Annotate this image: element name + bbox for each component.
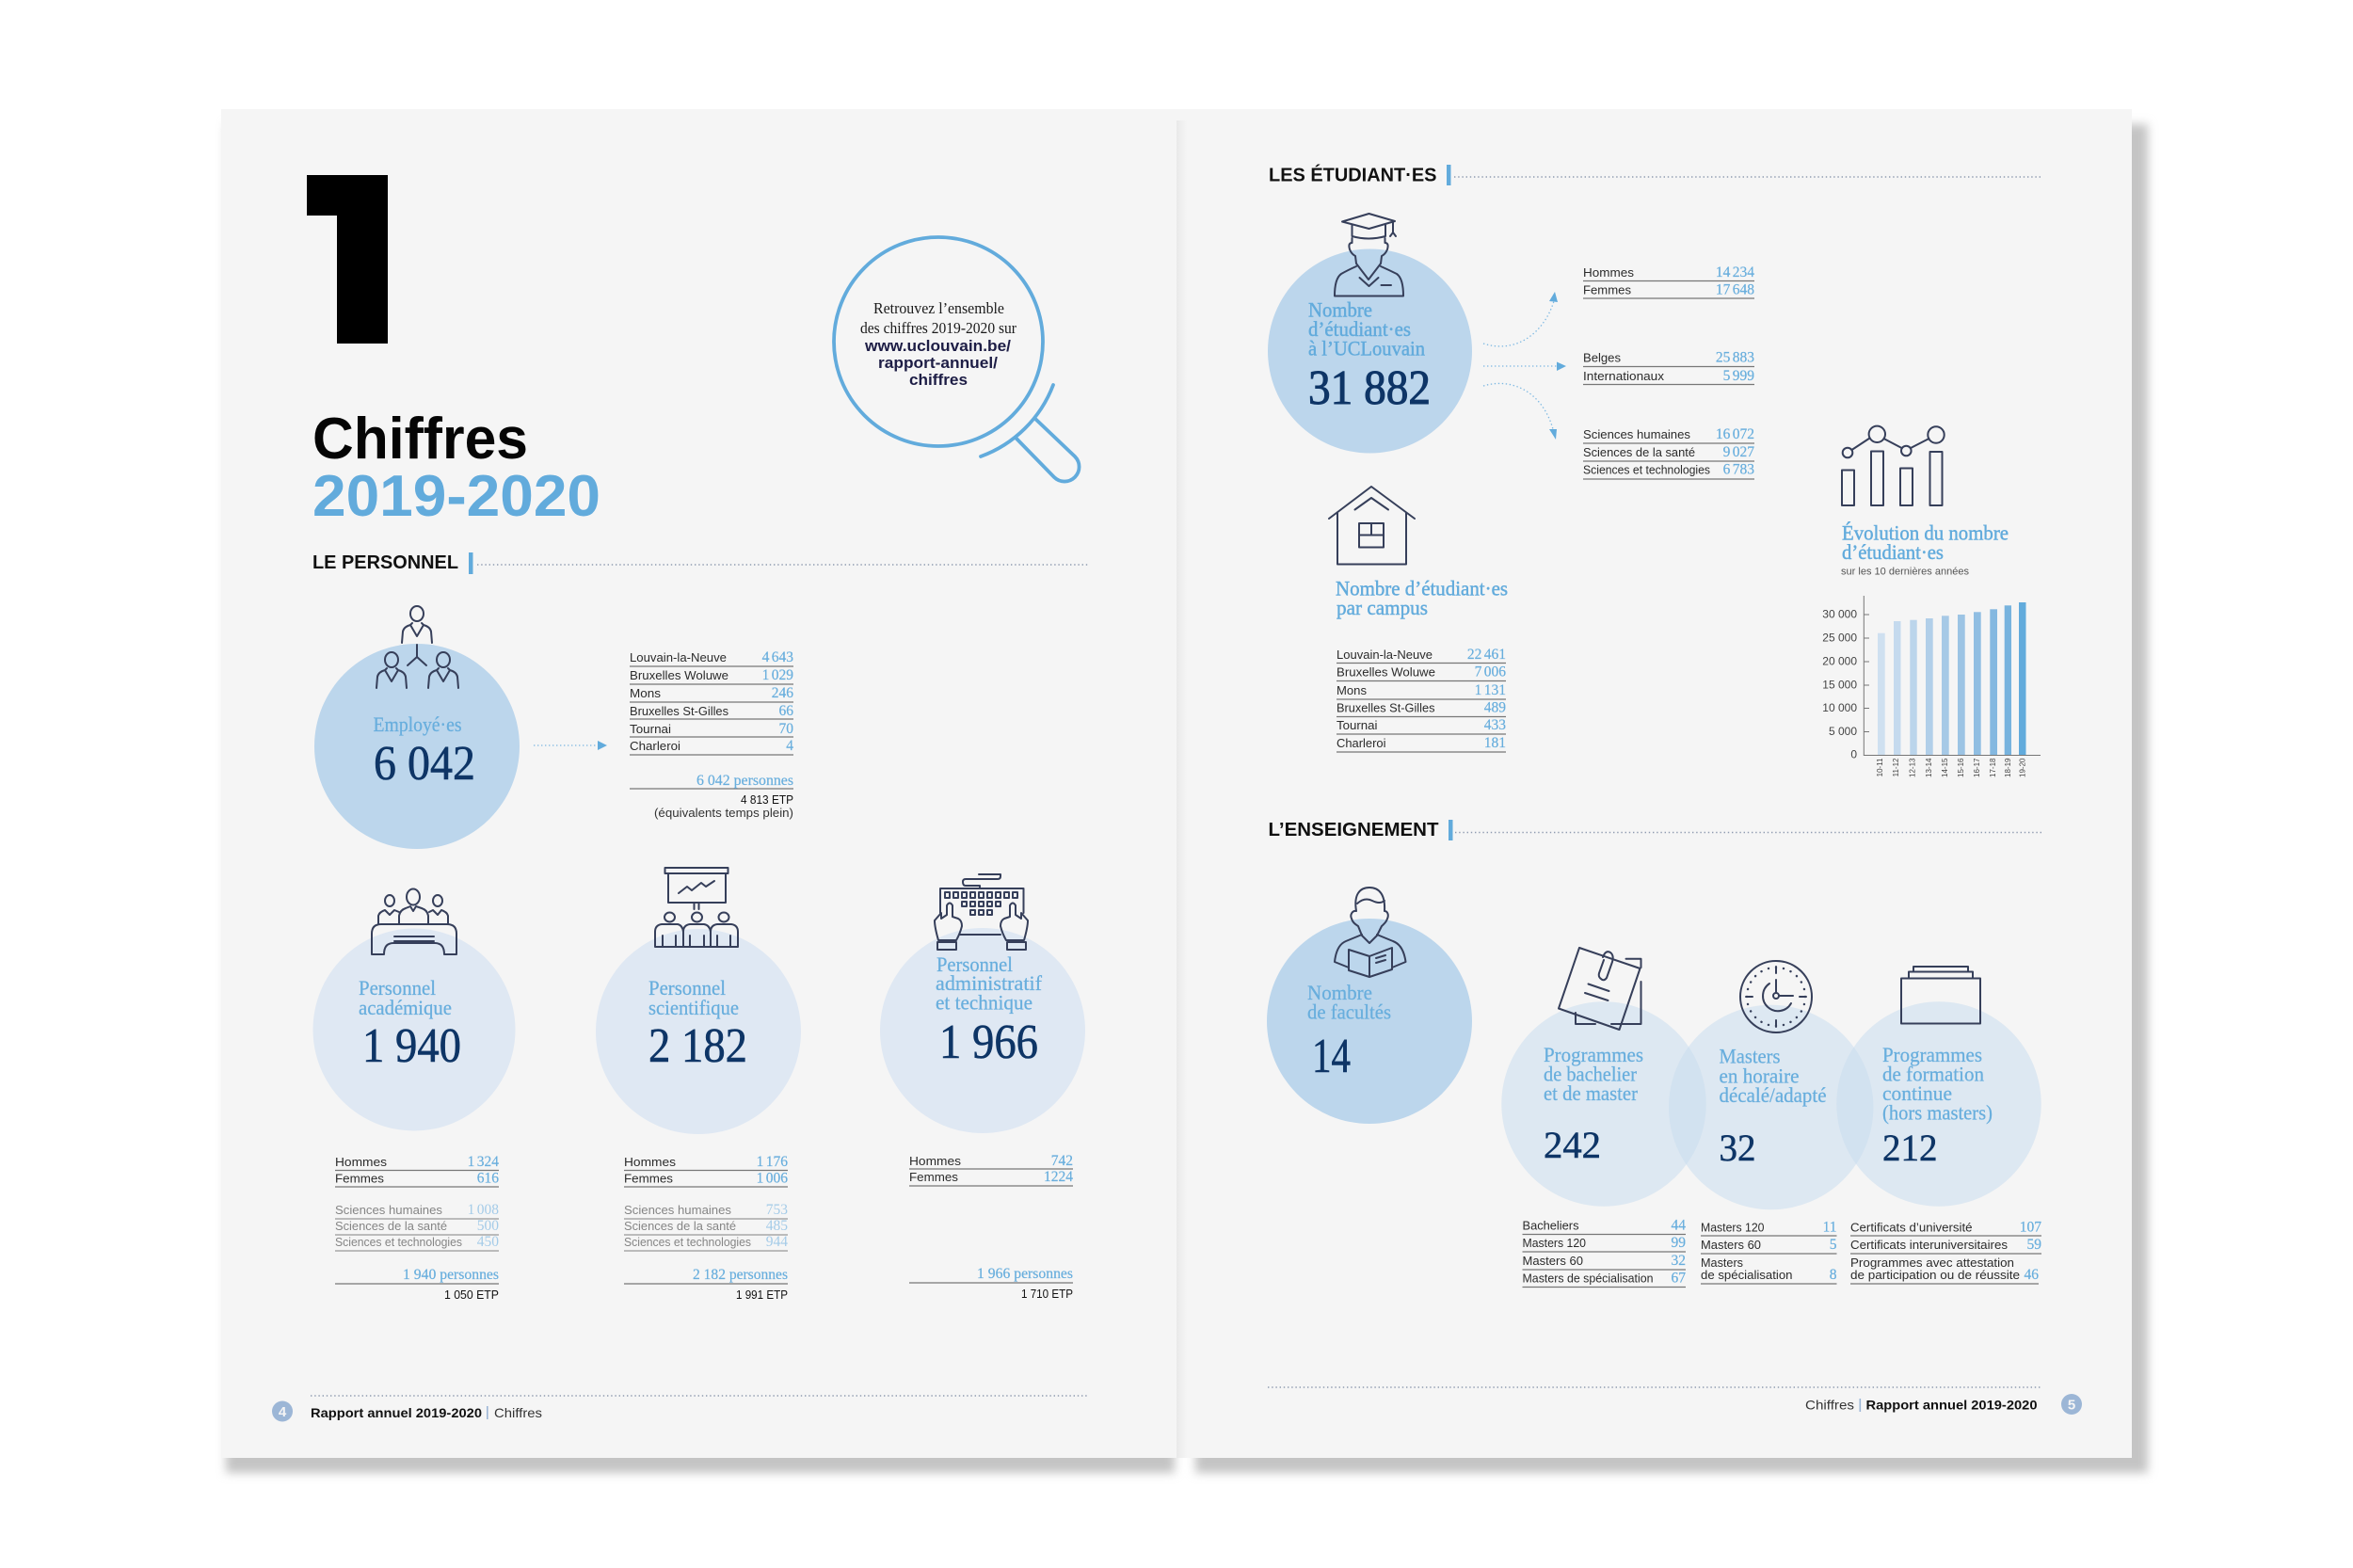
panel: personnel académique: Personnel (359, 976, 436, 1000)
panel: programmes de formation continue (1836, 1001, 2041, 1207)
table: personnel administratif et technique: 1224 (1044, 1169, 1073, 1185)
table: personnel scientifique: 2 182 personnes (693, 1267, 788, 1283)
table: employés par campus: 6 042 personnes (696, 773, 793, 789)
table: nationalité: 5 999 (1723, 368, 1754, 384)
bar chart: évolution du nombre d'étudiant·es: 20 000 (1822, 655, 1857, 668)
footer: left page: Chiffres (494, 1405, 542, 1420)
table: personnel académique: 1 008 (468, 1202, 499, 1218)
table: personnel administratif et technique: 1 710 ETP (1021, 1287, 1073, 1301)
table: programmes: 32 (1672, 1253, 1686, 1269)
heading: étudiant·es par campus: par campus (1337, 596, 1428, 619)
heading: évolution: Évolution du nombre (1842, 521, 2009, 544)
table: étudiant·es par campus: 22 461 (1467, 647, 1506, 663)
table: employés par campus: 246 (772, 685, 793, 701)
table: étudiant·es par campus: Mons (1337, 683, 1367, 697)
panel: nombre d'étudiant·es: 31 882 (1308, 361, 1431, 415)
heading: évolution: sur les 10 dernières années (1841, 567, 1969, 578)
table: personnel académique: Sciences de la santé (335, 1219, 447, 1233)
page backgrounds (221, 109, 2132, 1458)
table: personnel académique: Sciences et technologies (335, 1235, 462, 1249)
callout: magnifier (834, 237, 1080, 482)
table: étudiant·es par campus: Tournai (1337, 718, 1378, 732)
table: étudiant·es par campus: Bruxelles Woluwe (1337, 664, 1435, 680)
table: personnel scientifique: 485 (766, 1218, 788, 1234)
panel: employés: Employé·es (373, 712, 461, 736)
table: nationalité: Internationaux (1583, 369, 1665, 383)
bar chart: évolution du nombre d'étudiant·es: 14-15 (1941, 758, 1949, 777)
heading: l'enseignement (1269, 820, 2041, 840)
icon: clipped documents (1559, 948, 1641, 1030)
heading: évolution (1841, 521, 2009, 578)
table: employés par campus: 4 813 ETP (741, 792, 793, 807)
panel: nombre d'étudiant·es: d’étudiant·es (1308, 317, 1411, 341)
table: employés par campus: Louvain-la-Neuve (630, 650, 727, 664)
panel: employés: 6 042 (374, 737, 475, 791)
table: employés par campus: 4 643 (762, 649, 793, 665)
panel: masters en horaire décalé (1669, 1005, 1873, 1209)
table: hommes femmes: 14 234 (1716, 264, 1754, 280)
table: employés par campus: 4 (786, 738, 793, 754)
table: formation continue: de participation ou de réussite (1850, 1268, 2020, 1282)
table: hommes femmes (1583, 264, 1754, 298)
bar chart: évolution du nombre d'étudiant·es: 15-16 (1957, 758, 1965, 777)
table: personnel académique: 1 050 ETP (444, 1288, 499, 1302)
table: personnel académique: 450 (477, 1234, 499, 1250)
callout: magnifier: www.uclouvain.be/ (864, 337, 1011, 355)
chapter number 1 (307, 175, 388, 344)
table: étudiant·es par campus: 7 006 (1475, 664, 1506, 680)
table: personnel scientifique: 1 006 (757, 1171, 788, 1186)
table: masters horaire décalé: Masters (1701, 1256, 1743, 1270)
panel: programmes de formation continue: (hors masters) (1882, 1101, 1993, 1124)
panel: personnel administratif et technique: 1 966 (939, 1016, 1038, 1069)
table: formation continue: 107 (2020, 1220, 2041, 1235)
title: Chiffres (312, 407, 528, 472)
icon: employee hierarchy (376, 606, 458, 688)
table: personnel administratif et technique: Femmes (909, 1170, 959, 1184)
footer: left page (272, 1396, 1087, 1421)
bar chart: évolution du nombre d'étudiant·es: 18-19 (2004, 758, 2012, 777)
bar chart: évolution du nombre d'étudiant·es: 19-20 (2018, 758, 2027, 777)
arrows: student breakdowns (1483, 292, 1566, 440)
heading: étudiant·es par campus: Nombre d’étudiant·es (1336, 576, 1508, 600)
bar chart: évolution du nombre d'étudiant·es: 5 000 (1829, 725, 1857, 738)
table: personnel scientifique: Hommes (624, 1155, 677, 1169)
icon: graduate (1335, 214, 1403, 296)
table: personnel scientifique (624, 1154, 788, 1302)
table: secteurs (1583, 426, 1754, 479)
table: hommes femmes: Femmes (1583, 282, 1632, 297)
callout: magnifier: des chiffres 2019-2020 sur (860, 319, 1016, 337)
icon: presentation board and audience (655, 868, 738, 947)
table: étudiant·es par campus: 433 (1484, 717, 1506, 733)
table: programmes: 99 (1672, 1235, 1686, 1251)
panel: programmes de formation continue: de formation (1882, 1062, 1984, 1086)
callout: magnifier: chiffres (909, 371, 968, 389)
table: programmes: Masters de spécialisation (1523, 1271, 1653, 1286)
table: programmes: Bacheliers (1523, 1218, 1579, 1233)
table: personnel administratif et technique: 1 966 personnes (977, 1266, 1073, 1282)
panel: nombre de facultés: 14 (1312, 1030, 1351, 1083)
panel: personnel scientifique (596, 929, 801, 1134)
table: étudiant·es par campus: Louvain-la-Neuve (1337, 648, 1433, 662)
heading: les étudiant·es: LES ÉTUDIANT·ES (1269, 164, 1436, 186)
table: formation continue (1850, 1220, 2041, 1284)
heading: les étudiant·es (1269, 164, 2042, 186)
icon: house (1329, 487, 1415, 565)
panel: programmes de formation continue: continue (1882, 1081, 1952, 1105)
icon: person reading a book (1335, 888, 1406, 977)
table: nationalité: Belges (1583, 350, 1622, 365)
table: personnel scientifique: Sciences humaines (624, 1203, 731, 1217)
footer: right page: 5 (2068, 1397, 2075, 1414)
footer: right page: Chiffres (1805, 1397, 1854, 1412)
icon: lectern with three people (372, 888, 456, 954)
bar chart: évolution du nombre d'étudiant·es: 13-14 (1925, 758, 1933, 777)
table: personnel scientifique: Sciences et technologies (624, 1235, 751, 1249)
table: personnel académique: 1 324 (468, 1154, 499, 1170)
table: employés par campus: (équivalents temps plein) (654, 806, 793, 820)
panel: nombre d'étudiant·es: à l’UCLouvain (1308, 337, 1425, 360)
table: secteurs: 9 027 (1723, 444, 1754, 460)
icon: clock (1740, 961, 1812, 1032)
panel: employés (314, 644, 520, 849)
table: personnel administratif et technique: Hommes (909, 1154, 962, 1168)
arrow: employés to table (534, 741, 607, 750)
table: personnel académique: Femmes (335, 1171, 385, 1186)
panel: programmes de bachelier et de master: et de master (1544, 1081, 1639, 1105)
panel: personnel scientifique: scientifique (648, 996, 739, 1019)
bar chart: évolution du nombre d'étudiant·es: 16-17 (1973, 758, 1981, 777)
table: masters horaire décalé: 11 (1823, 1220, 1837, 1235)
table: personnel scientifique: Femmes (624, 1171, 674, 1186)
icon: stacked folders (1901, 967, 1980, 1024)
panel: personnel académique: académique (359, 996, 452, 1019)
table: masters horaire décalé: Masters 60 (1701, 1238, 1761, 1252)
table: programmes: 67 (1672, 1271, 1686, 1286)
title (312, 407, 600, 529)
table: personnel académique: 1 940 personnes (403, 1267, 499, 1283)
table: hommes femmes: 17 648 (1716, 282, 1754, 297)
table: employés par campus: Bruxelles Woluwe (630, 668, 728, 682)
table: nationalité (1583, 350, 1754, 384)
table: étudiant·es par campus (1337, 647, 1506, 752)
bar chart: évolution du nombre d'étudiant·es: 15 000 (1822, 678, 1857, 691)
panel: personnel administratif et technique: administratif (936, 971, 1043, 995)
table: programmes (1523, 1218, 1686, 1288)
bar chart: évolution du nombre d'étudiant·es: 0 (1850, 747, 1857, 760)
panel: programmes de bachelier et de master: 242 (1544, 1124, 1601, 1166)
panel: personnel académique: 1 940 (362, 1019, 461, 1073)
table: formation continue: Certificats d’université (1850, 1220, 1973, 1235)
bar chart: évolution du nombre d'étudiant·es (1822, 596, 2041, 777)
panel: masters en horaire décalé: en horaire (1719, 1064, 1800, 1088)
callout: magnifier: rapport-annuel/ (878, 354, 998, 372)
table: secteurs: Sciences et technologies (1583, 463, 1710, 476)
bar chart: évolution du nombre d'étudiant·es: 11-12 (1892, 758, 1900, 776)
table: personnel scientifique: Sciences de la santé (624, 1219, 736, 1233)
table: étudiant·es par campus: Charleroi (1337, 736, 1386, 750)
panel: programmes de formation continue: Programmes (1882, 1043, 1982, 1066)
table: nationalité: 25 883 (1716, 350, 1754, 365)
panel: personnel scientifique: Personnel (648, 976, 726, 1000)
table: étudiant·es par campus: 489 (1484, 700, 1506, 715)
panel: personnel administratif et technique: Personnel (936, 952, 1013, 976)
heading: le personnel (312, 552, 1088, 574)
table: formation continue: Certificats interuniversitaires (1850, 1238, 2009, 1252)
heading: étudiant·es par campus (1336, 576, 1508, 619)
bar chart: évolution du nombre d'étudiant·es: 10 000 (1822, 701, 1857, 714)
panel: programmes de bachelier et de master: Programmes (1544, 1043, 1643, 1066)
bar chart: évolution du nombre d'étudiant·es: 17-18 (1989, 758, 1997, 777)
heading: le personnel: LE PERSONNEL (312, 552, 458, 573)
table: masters horaire décalé: 5 (1830, 1237, 1837, 1253)
table: personnel scientifique: 1 991 ETP (736, 1288, 788, 1302)
table: secteurs: 6 783 (1723, 461, 1754, 478)
table: secteurs: 16 072 (1716, 426, 1754, 442)
panel: nombre de facultés (1267, 919, 1472, 1124)
table: employés par campus: Bruxelles St-Gilles (630, 704, 728, 718)
table: programmes: 44 (1672, 1218, 1686, 1233)
panel: personnel académique (312, 928, 516, 1131)
table: personnel scientifique: 944 (766, 1234, 788, 1250)
table: personnel académique: Sciences humaines (335, 1203, 442, 1217)
table: étudiant·es par campus: 1 131 (1475, 682, 1506, 698)
table: employés par campus: 70 (779, 721, 793, 737)
title: 2019-2020 (312, 464, 600, 529)
footer: right page (1268, 1387, 2082, 1415)
table: personnel académique: 500 (477, 1218, 499, 1234)
bar chart: évolution du nombre d'étudiant·es: 25 000 (1822, 631, 1857, 644)
table: employés par campus: Mons (630, 686, 662, 700)
table: masters horaire décalé: 8 (1830, 1267, 1837, 1283)
table: employés par campus (630, 649, 793, 820)
bar chart: évolution du nombre d'étudiant·es: 12-13 (1909, 758, 1916, 777)
table: étudiant·es par campus: Bruxelles St-Gilles (1337, 700, 1435, 715)
table: employés par campus: Charleroi (630, 739, 680, 753)
icon: hands on keyboard (935, 874, 1028, 950)
table: personnel académique: Hommes (335, 1155, 388, 1169)
table: masters horaire décalé: de spécialisation (1701, 1268, 1792, 1282)
table: secteurs: Sciences de la santé (1583, 445, 1695, 459)
table: personnel administratif et technique (909, 1153, 1073, 1301)
panel: masters en horaire décalé: 32 (1719, 1127, 1756, 1169)
table: masters horaire décalé: Masters 120 (1701, 1220, 1764, 1235)
panel: nombre de facultés: Nombre (1307, 981, 1372, 1004)
table: formation continue: 59 (2027, 1237, 2041, 1253)
table: programmes: Masters 60 (1523, 1254, 1583, 1268)
table: personnel scientifique: 1 176 (757, 1154, 788, 1170)
spread shadows (226, 124, 2148, 1473)
panel: programmes de bachelier et de master (1501, 1001, 1706, 1207)
panel: nombre d'étudiant·es (1268, 248, 1472, 454)
table: personnel scientifique: 753 (766, 1202, 788, 1218)
heading: évolution: d’étudiant·es (1842, 540, 1944, 564)
table: étudiant·es par campus: 181 (1484, 735, 1506, 751)
heading: l'enseignement: L’ENSEIGNEMENT (1269, 820, 1438, 840)
panel: personnel administratif et technique (880, 928, 1085, 1133)
table: employés par campus: 1 029 (762, 667, 793, 683)
panel: personnel administratif et technique: et technique (936, 990, 1032, 1015)
footer: right page: Rapport annuel 2019-2020 (1865, 1397, 2038, 1412)
icon: bars and line chart (1842, 426, 1945, 505)
callout: magnifier: Retrouvez l’ensemble (873, 299, 1004, 317)
table: employés par campus: Tournai (630, 722, 671, 736)
bar chart: évolution du nombre d'étudiant·es: 30 000 (1822, 608, 1857, 621)
table: hommes femmes: Hommes (1583, 265, 1635, 280)
table: personnel académique: 616 (477, 1171, 499, 1186)
panel: programmes de formation continue: 212 (1882, 1127, 1937, 1169)
panel: personnel scientifique: 2 182 (648, 1019, 747, 1073)
panel: programmes de bachelier et de master: de bachelier (1544, 1062, 1638, 1086)
table: masters horaire décalé (1701, 1220, 1837, 1284)
table: formation continue: Programmes avec attestation (1850, 1256, 2014, 1270)
panel: masters en horaire décalé: décalé/adapté (1719, 1083, 1826, 1107)
table: employés par campus: 66 (779, 703, 793, 719)
bar chart: évolution du nombre d'étudiant·es: 10-11 (1876, 758, 1884, 776)
table: formation continue: 46 (2024, 1267, 2039, 1283)
panel: nombre d'étudiant·es: Nombre (1308, 297, 1372, 322)
table: secteurs: Sciences humaines (1583, 427, 1690, 441)
table: programmes: Masters 120 (1523, 1236, 1586, 1250)
table: personnel académique (335, 1154, 499, 1302)
footer: left page: 4 (279, 1404, 287, 1420)
panel: nombre de facultés: de facultés (1307, 1000, 1391, 1024)
panel: masters en horaire décalé: Masters (1719, 1045, 1781, 1067)
table: personnel administratif et technique: 742 (1051, 1153, 1073, 1169)
footer: left page: Rapport annuel 2019-2020 (311, 1405, 482, 1420)
